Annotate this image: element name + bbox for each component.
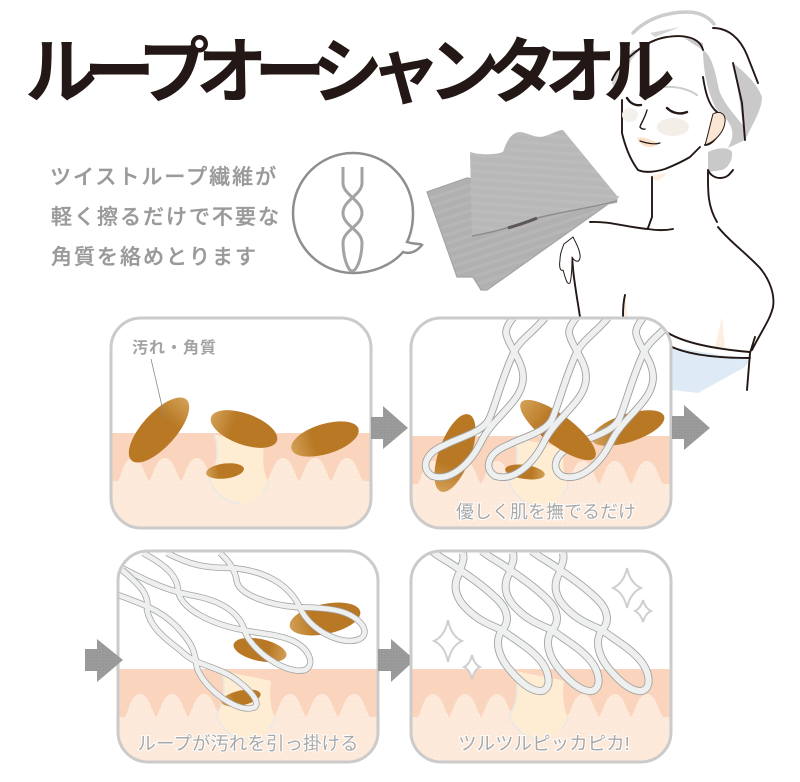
woman: towel wrap xyxy=(672,347,750,393)
panel 2: gently stroke the skin xyxy=(410,316,672,530)
woman: hand xyxy=(560,237,580,283)
woman: front hair shading xyxy=(612,27,680,97)
towel: fold shadow xyxy=(508,218,537,228)
woman: chest shading xyxy=(715,317,725,348)
panel 1 skin xyxy=(112,433,370,526)
panel 1 label: 汚れ・角質 xyxy=(132,338,217,357)
woman: hair bun xyxy=(708,148,732,172)
panel 2 background xyxy=(411,318,671,528)
panel 4: smooth and sparkling xyxy=(410,550,672,764)
panel 4 background xyxy=(411,551,671,762)
woman: hair highlight xyxy=(633,12,714,33)
panel 1 leader line xyxy=(151,359,165,419)
towel: bottom layer xyxy=(427,178,618,290)
bubble outline xyxy=(293,153,422,273)
panel 3 background xyxy=(118,551,378,762)
woman: nose xyxy=(640,110,647,129)
panel 4 loops xyxy=(432,551,649,691)
arrow 2 xyxy=(672,405,710,450)
arrow 1 xyxy=(371,406,408,449)
arrow 4 xyxy=(378,639,415,682)
panel 2 caption: 優しく肌を撫でるだけ xyxy=(456,502,636,522)
description text xyxy=(50,166,281,269)
woman: ear xyxy=(705,112,725,145)
woman: neck shadow xyxy=(652,173,668,181)
panel 4 skin xyxy=(412,669,670,760)
woman: lips xyxy=(637,138,660,147)
panel 3 flakes and loops xyxy=(118,553,365,709)
speech bubble: twist loop fibre xyxy=(293,153,422,273)
panel 2 skin xyxy=(412,436,670,526)
panel 4 caption: ツルツルピッカピカ! xyxy=(458,733,630,754)
woman: mouth line xyxy=(640,141,660,144)
towel: fold edge xyxy=(472,201,617,236)
description line 1: ツイストループ繊維が xyxy=(50,166,278,189)
towel product photo xyxy=(427,130,618,290)
arrow 3 xyxy=(85,639,123,682)
description line 3: 角質を絡めとります xyxy=(51,246,258,269)
panel 1 keratin flakes xyxy=(119,388,363,481)
panel 3: loops hook the dirt xyxy=(116,550,380,764)
woman: eyes xyxy=(627,98,687,113)
panel 2 border xyxy=(411,318,671,528)
woman: far cheek xyxy=(622,108,638,122)
woman: arm shading xyxy=(624,295,628,317)
description line 2: 軽く擦るだけで不要な xyxy=(51,206,281,229)
woman: cheek blush xyxy=(657,118,689,136)
title: ループオーシャンタオル xyxy=(25,33,675,113)
panel 3 skin xyxy=(120,669,376,760)
woman: hair shading outer xyxy=(733,63,762,140)
panel 1 border xyxy=(111,318,371,528)
panel 1: dirt and keratin on skin xyxy=(100,318,380,540)
panel 4 border xyxy=(411,551,671,762)
illustration: woman xyxy=(560,12,773,393)
panel 1 background xyxy=(111,318,371,528)
panel 3 border xyxy=(118,551,378,762)
panel 4 sparkles xyxy=(434,568,651,679)
towel: top fold xyxy=(470,130,618,237)
woman: hair shading inner xyxy=(683,37,745,148)
panel 2 flakes and loops xyxy=(426,318,675,497)
fibre strand xyxy=(343,167,362,271)
panel 3 caption: ループが汚れを引っ掛ける xyxy=(138,733,358,754)
woman: outlines xyxy=(572,28,773,390)
woman: eyebrow xyxy=(665,87,697,95)
